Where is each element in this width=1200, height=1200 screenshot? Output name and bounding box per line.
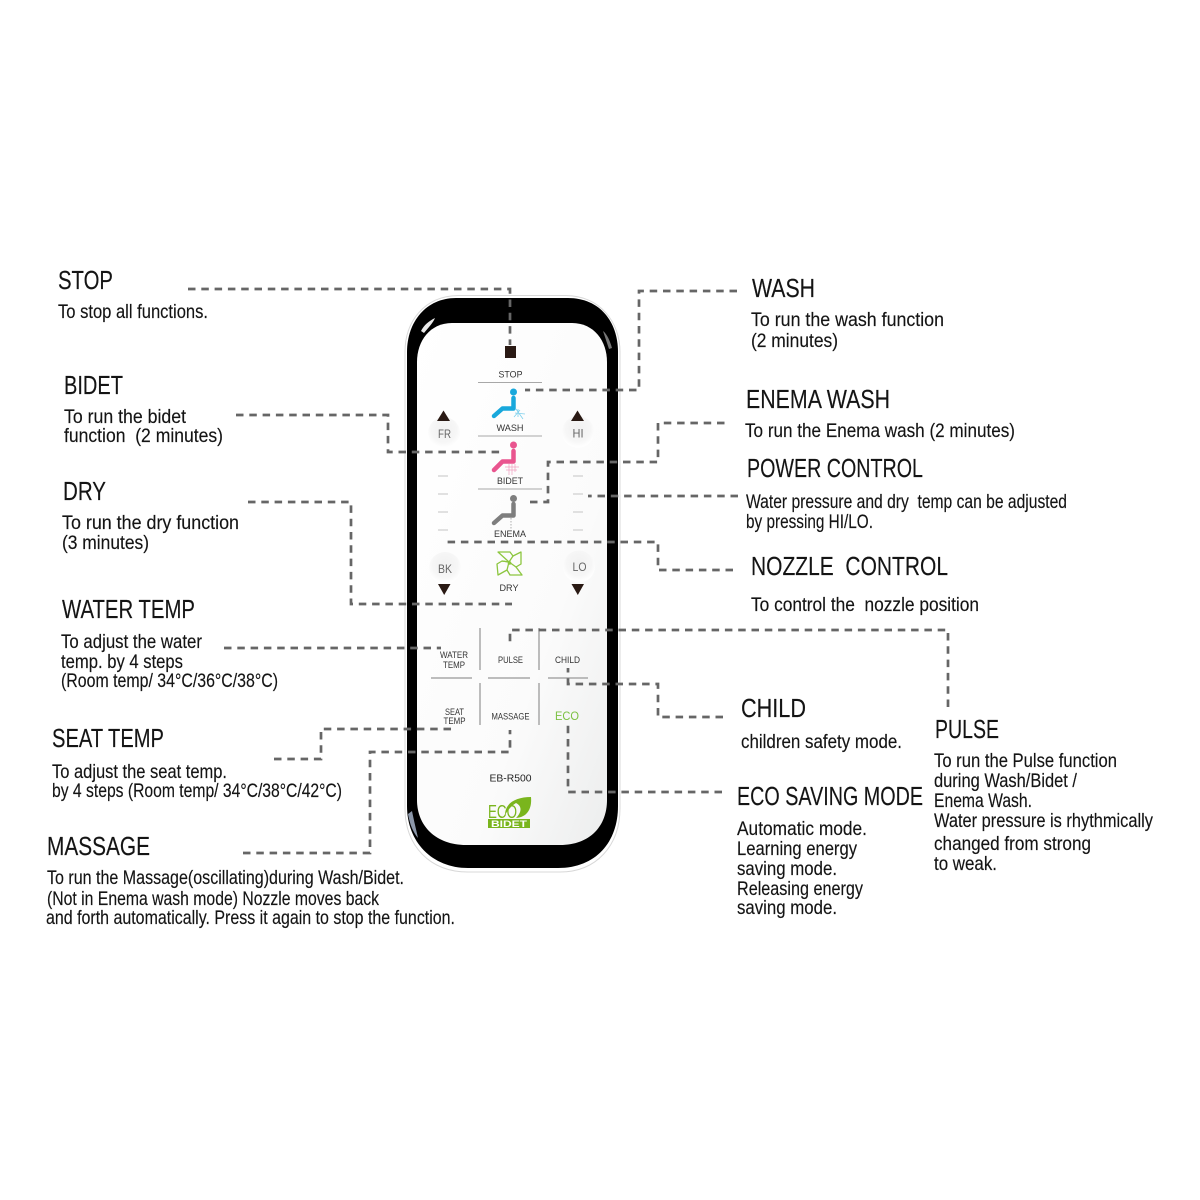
callout: nozzle control	[751, 551, 979, 616]
eco bidet logo: ECO	[488, 802, 517, 822]
level marks left	[438, 476, 448, 530]
pulse button label: PULSE	[498, 655, 523, 666]
enema label: ENEMA	[494, 529, 527, 540]
eco bidet logo: BIDET	[491, 819, 528, 829]
connector: enema wash	[530, 423, 730, 502]
callout: bidet: function (2 minutes)	[64, 425, 223, 447]
connector: nozzle control	[443, 542, 733, 570]
fr button: FR	[438, 427, 451, 441]
callout: water temp: (Room temp/ 34°C/36°C/38°C)	[61, 670, 278, 692]
connector: wash	[525, 291, 737, 390]
callout: massage: MASSAGE	[47, 831, 150, 861]
callout: child	[741, 693, 902, 753]
massage button label: MASSAGE	[492, 712, 530, 722]
water temp button label: TEMP	[443, 660, 465, 671]
callout: power control: Water pressure and dry temp can be adjusted	[746, 491, 1067, 513]
child button label: CHILD	[555, 655, 580, 666]
callout: nozzle control: To control the nozzle position	[751, 594, 979, 616]
callout: pulse: Enema Wash.	[934, 790, 1032, 812]
seat temp button label: SEAT	[445, 707, 464, 718]
callout: wash: (2 minutes)	[751, 330, 838, 352]
callout: bidet: To run the bidet	[64, 406, 187, 428]
stop button	[505, 346, 516, 358]
callout: eco saving mode: Automatic mode.	[737, 818, 867, 840]
callout: enema wash: To run the Enema wash (2 minutes)	[745, 420, 1015, 442]
callout: eco saving mode: Releasing energy	[737, 878, 863, 900]
connector: pulse	[510, 630, 948, 707]
callout: eco saving mode: ECO SAVING MODE	[737, 781, 923, 811]
seat temp button label	[444, 707, 466, 727]
remote control	[405, 296, 620, 872]
remote white face	[417, 323, 607, 845]
callout: massage	[46, 831, 455, 929]
callout: seat temp	[52, 723, 342, 802]
connector: massage	[243, 730, 510, 853]
callout: wash: To run the wash function	[751, 309, 944, 331]
fr button	[428, 410, 460, 449]
callout: stop: To stop all functions.	[58, 301, 208, 323]
callout: massage: (Not in Enema wash mode) Nozzle moves back	[47, 888, 379, 910]
callout: eco saving mode: Learning energy	[737, 838, 857, 860]
callout: eco saving mode	[737, 781, 923, 919]
glare top left	[421, 318, 435, 333]
callout: enema wash	[745, 384, 1015, 442]
model number: EB-R500	[490, 772, 532, 784]
water temp button label: WATER	[440, 650, 468, 661]
callout: bidet	[64, 370, 223, 447]
connector: eco saving mode	[568, 723, 722, 792]
callout: massage: To run the Massage(oscillating)during Wash/Bidet.	[47, 867, 404, 889]
bidet icon	[494, 442, 519, 475]
connector: dry	[248, 502, 512, 604]
callout: massage: and forth automatically. Press it again to stop the function.	[46, 907, 455, 929]
eco bidet logo	[488, 797, 531, 829]
callout: nozzle control: NOZZLE CONTROL	[751, 551, 948, 581]
callout: pulse: during Wash/Bidet /	[934, 770, 1077, 792]
callout: water temp: temp. by 4 steps	[61, 651, 183, 673]
dry icon	[497, 552, 522, 575]
callout: power control	[746, 453, 1067, 533]
wash icon	[494, 388, 525, 419]
callout: pulse: to weak.	[934, 853, 997, 875]
wash label: WASH	[496, 423, 524, 434]
connector: power control	[588, 495, 738, 497]
callout: seat temp: SEAT TEMP	[52, 723, 164, 753]
hi button	[562, 410, 594, 448]
callout: enema wash: ENEMA WASH	[746, 384, 890, 414]
callout: wash	[751, 273, 944, 352]
bk button: BK	[438, 562, 452, 576]
bk button	[429, 552, 461, 595]
callout: eco saving mode: saving mode.	[737, 858, 837, 880]
eco button label: ECO	[555, 711, 579, 723]
callout: power control: POWER CONTROL	[747, 453, 923, 483]
callout: eco saving mode: saving mode.	[737, 897, 837, 919]
callout: stop	[58, 265, 208, 323]
remote black body	[407, 298, 618, 868]
callout: water temp: WATER TEMP	[62, 594, 195, 624]
button grid	[431, 628, 588, 725]
callout: child: children safety mode.	[741, 731, 902, 753]
callout: seat temp: by 4 steps (Room temp/ 34°C/38°C/42°C)	[52, 780, 342, 802]
connector: child	[568, 668, 723, 717]
connector: water temp	[224, 647, 441, 649]
callout: child: CHILD	[741, 693, 806, 723]
level marks right	[573, 476, 583, 530]
callout: pulse: PULSE	[935, 714, 999, 744]
glare bottom left	[408, 811, 418, 838]
callout: wash: WASH	[752, 273, 815, 303]
callout: pulse	[934, 714, 1153, 875]
lo button	[563, 550, 595, 595]
callout: power control: by pressing HI/LO.	[746, 511, 873, 533]
glare top right	[603, 331, 612, 349]
callout: stop: STOP	[58, 265, 113, 295]
stop label: STOP	[498, 370, 522, 380]
connector: bidet	[236, 415, 500, 452]
callout: dry: (3 minutes)	[62, 532, 149, 554]
seat temp button label: TEMP	[444, 716, 466, 727]
callout: water temp	[61, 594, 278, 692]
callout: dry	[62, 476, 239, 554]
dry label: DRY	[500, 583, 519, 594]
remote outline	[405, 296, 620, 872]
lo button: LO	[572, 560, 586, 574]
hi button: HI	[572, 426, 584, 440]
callout: dry: To run the dry function	[62, 512, 239, 534]
callout: pulse: changed from strong	[934, 833, 1091, 855]
callout: pulse: To run the Pulse function	[934, 750, 1117, 772]
callout: dry: DRY	[63, 476, 106, 506]
enema icon	[494, 495, 517, 530]
callout: water temp: To adjust the water	[61, 631, 202, 653]
connector: seat temp	[274, 729, 455, 759]
bidet label: BIDET	[497, 476, 523, 487]
callout: pulse: Water pressure is rhythmically	[934, 810, 1153, 832]
water temp button label	[440, 650, 468, 671]
callout: bidet: BIDET	[64, 370, 123, 400]
callout: seat temp: To adjust the seat temp.	[52, 761, 227, 783]
connector: stop	[188, 289, 510, 345]
